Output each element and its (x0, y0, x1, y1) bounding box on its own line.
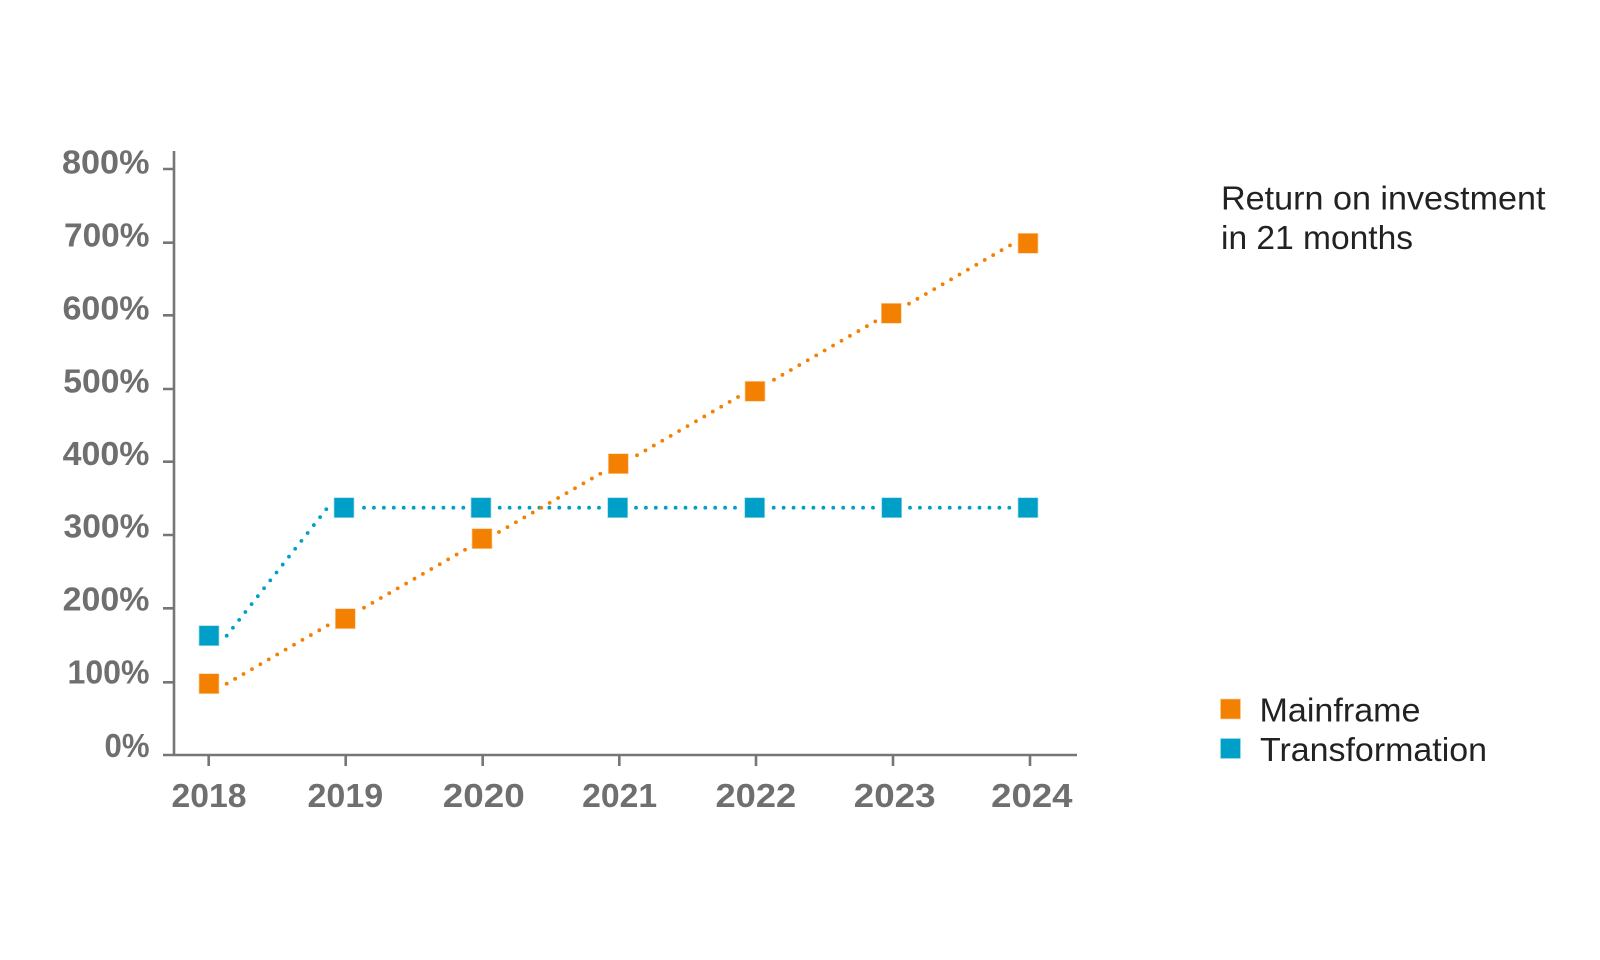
y axis with ticks (163, 151, 174, 755)
legend item: Mainframe: Mainframe (1260, 692, 1420, 729)
y axis labels: 0% (104, 727, 150, 764)
y axis labels: 700% (64, 217, 150, 254)
chart title text (1221, 179, 1546, 256)
y axis labels: 300% (64, 507, 150, 544)
x axis year labels (172, 777, 1073, 814)
x axis year labels: 2023 (854, 777, 936, 814)
y axis labels: 500% (63, 362, 149, 399)
y axis labels: 600% (62, 290, 150, 327)
x axis year labels: 2022 (716, 777, 796, 814)
x axis year labels: 2018 (172, 777, 246, 814)
series: Mainframe markers (199, 233, 1038, 694)
x axis with ticks (163, 755, 1077, 766)
legend (1220, 692, 1487, 768)
y axis labels: 200% (63, 581, 150, 618)
series: Transformation dotted line (227, 508, 1010, 636)
y axis labels: 400% (63, 435, 150, 472)
y axis labels: 800% (62, 143, 150, 180)
chart title text: in 21 months (1221, 219, 1413, 256)
series: Mainframe dotted line (227, 245, 1010, 684)
x axis year labels: 2024 (991, 777, 1073, 814)
x axis year labels: 2021 (582, 777, 657, 814)
legend item: Transformation: Transformation (1260, 731, 1487, 768)
x axis year labels: 2019 (308, 777, 383, 814)
chart title text: Return on investment (1221, 179, 1546, 216)
y axis labels (62, 143, 150, 764)
y axis labels: 100% (68, 653, 150, 690)
series: Transformation markers (199, 498, 1038, 646)
x axis year labels: 2020 (443, 777, 525, 814)
